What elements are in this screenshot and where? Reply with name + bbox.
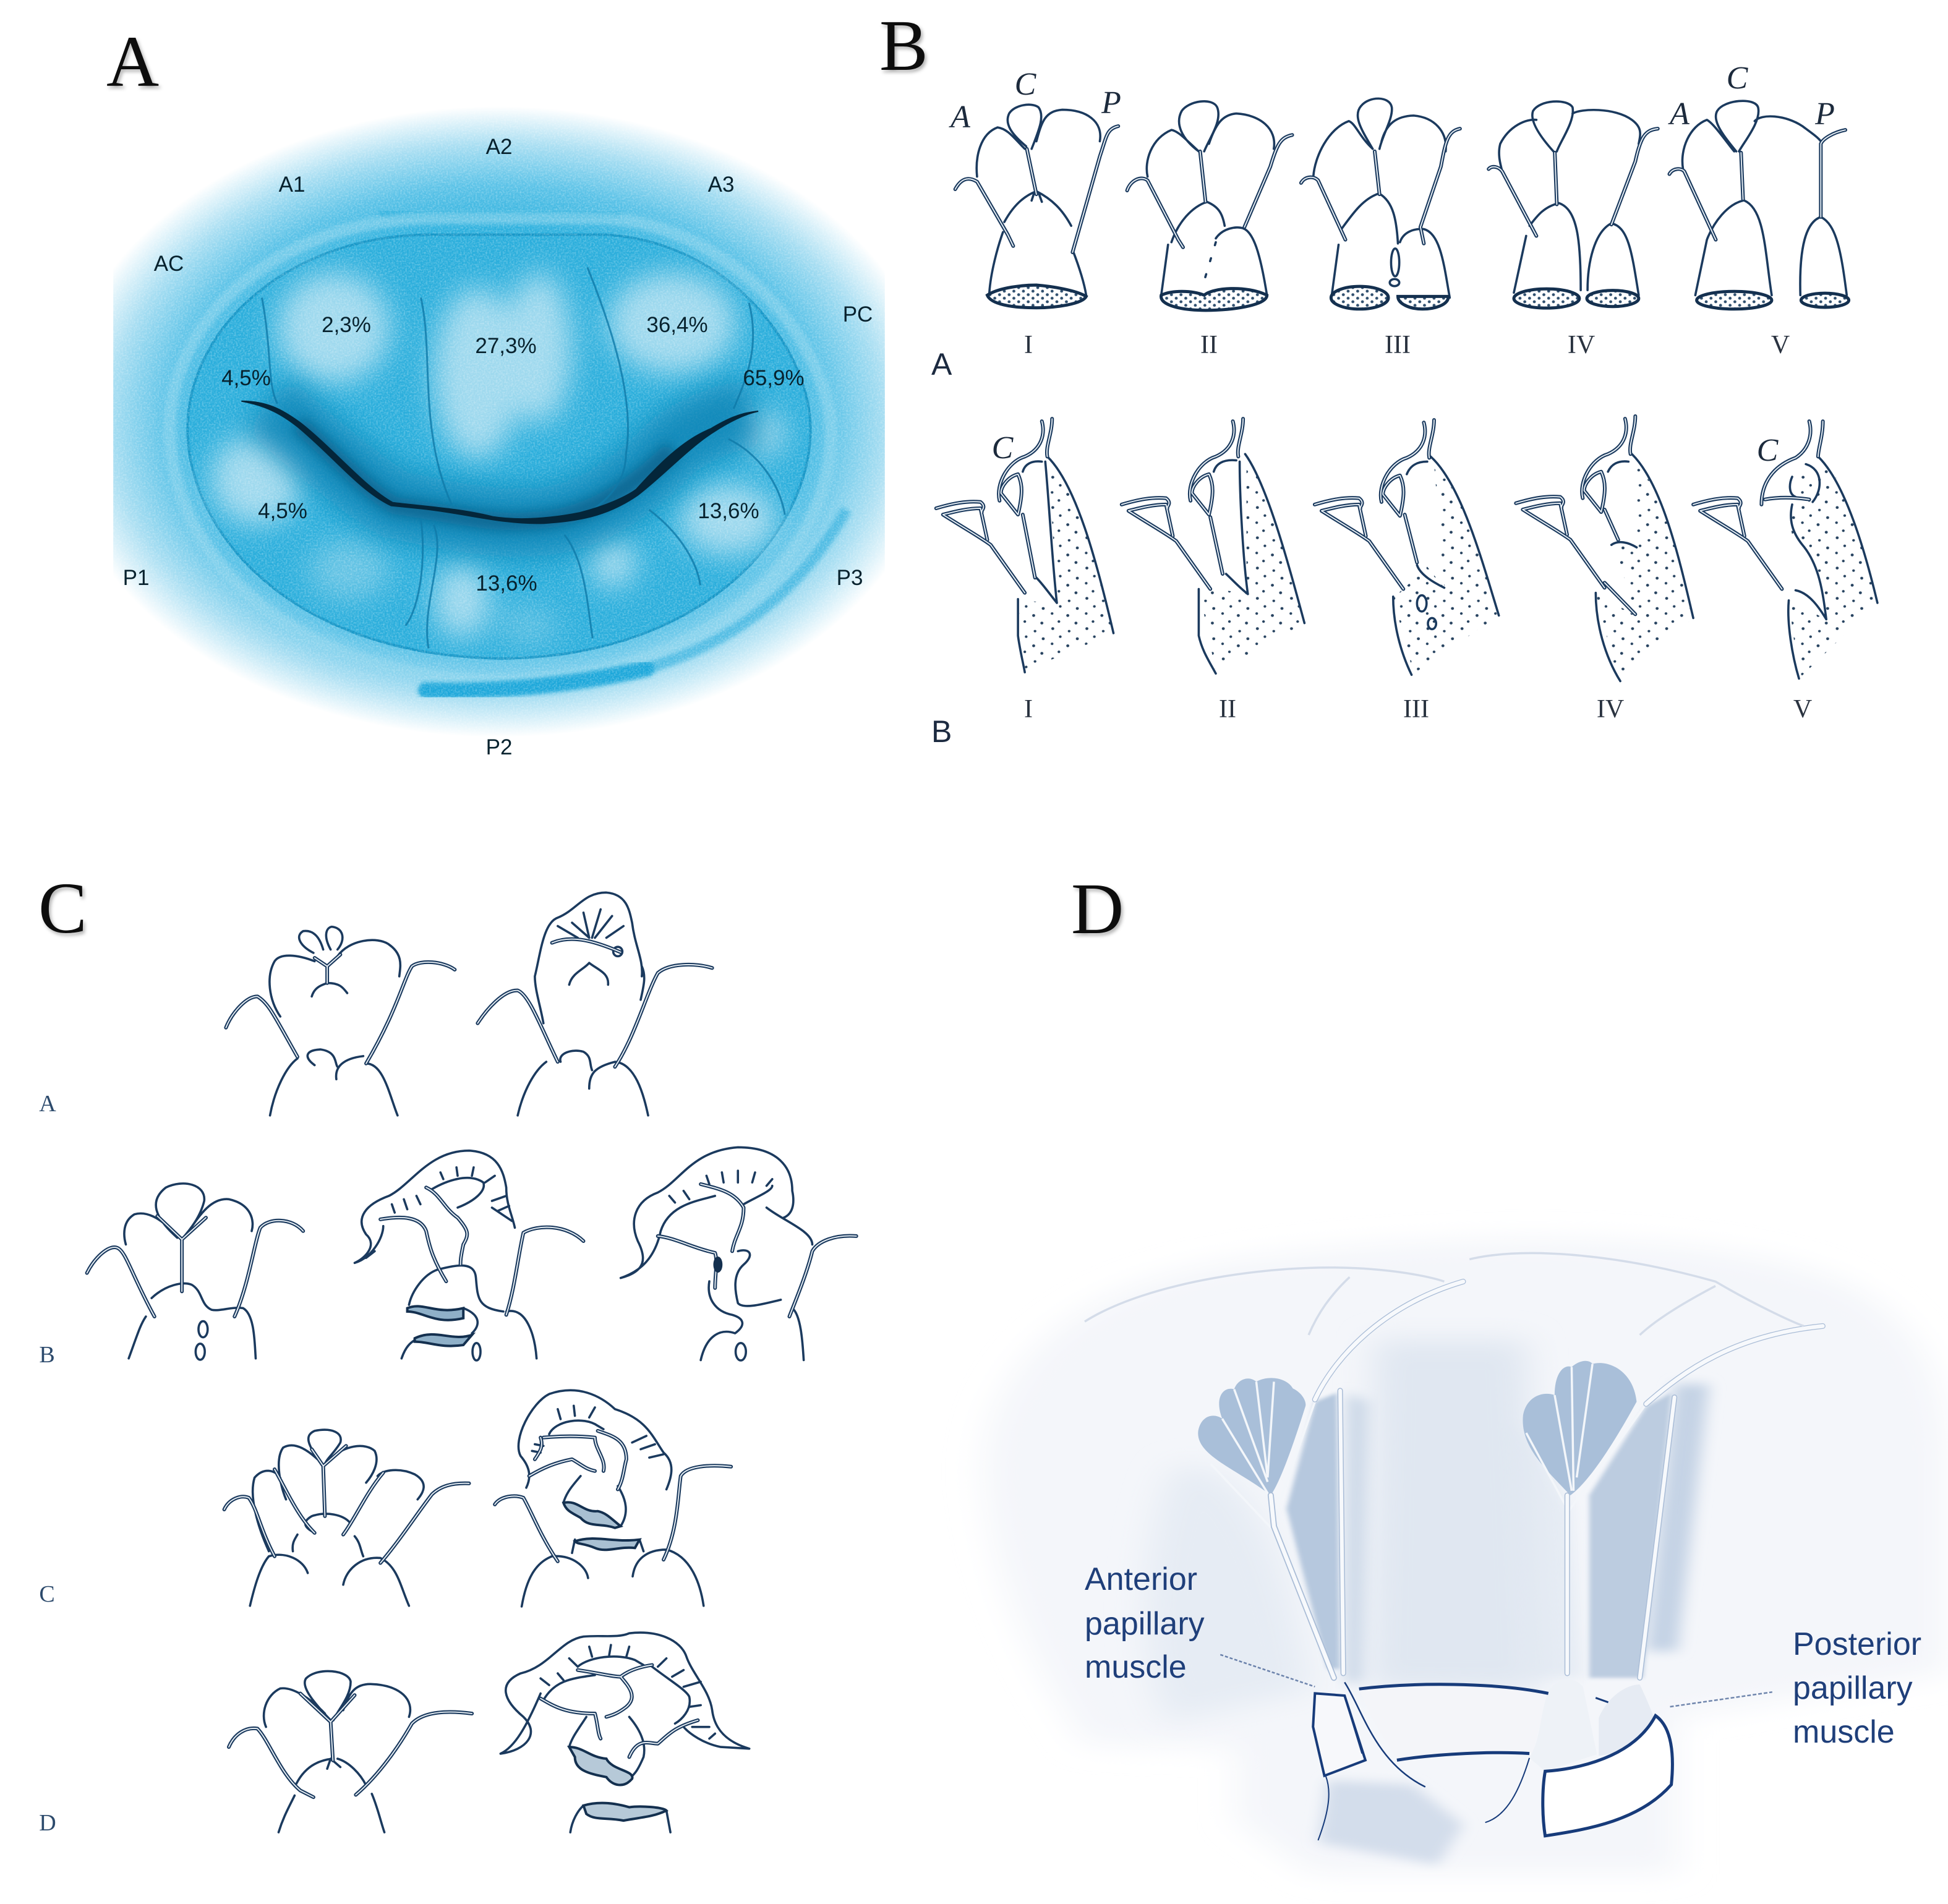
label: posterior papillary muscle: [1793, 1626, 1921, 1750]
label: anterior papillary muscle: [1085, 1561, 1205, 1685]
drawing III: [1301, 98, 1460, 309]
drawing V: [1669, 101, 1849, 309]
illustration: chordae and papillary muscles: [983, 1239, 1947, 1874]
band right: [1543, 1715, 1672, 1836]
labels: valve segments and percentages: 2,3%: [322, 313, 371, 337]
row A labels: A: [949, 100, 970, 135]
row B labels: C: [992, 430, 1014, 466]
row B labels: B: [931, 714, 952, 749]
row A labels: [931, 61, 1835, 382]
row B labels: [931, 430, 1812, 749]
row C open: [495, 1390, 731, 1607]
row A labels: II: [1200, 331, 1218, 359]
row B labels: C: [1757, 433, 1779, 468]
panel D: papillary muscles: [983, 868, 1947, 1874]
leaflet fan right: [1523, 1361, 1636, 1495]
row A labels: P: [1101, 85, 1121, 121]
label: anterior papillary muscle: papillary: [1085, 1606, 1205, 1642]
labels: valve segments and percentages: 13,6%: [698, 499, 759, 523]
label: posterior papillary muscle: Posterior: [1793, 1626, 1921, 1662]
row A labels: IV: [1568, 331, 1595, 359]
row B open 1: [355, 1151, 584, 1360]
rows A and B drawings: [87, 892, 857, 1360]
labels: valve segments and percentages: A3: [708, 173, 734, 197]
panel A: mitral valve atrial view: [57, 21, 939, 759]
labels: valve segments and percentages: 65,9%: [743, 366, 805, 390]
drawing II: [1127, 101, 1292, 310]
labels: valve segments and percentages: P3: [837, 566, 863, 590]
label: posterior papillary muscle: papillary: [1793, 1670, 1913, 1706]
row A labels: C: [1015, 67, 1037, 102]
section V: [1693, 421, 1878, 678]
panel letter D: D: [1071, 868, 1124, 949]
row A labels: III: [1385, 331, 1411, 359]
row B: lateral sections I to V: [936, 416, 1878, 681]
labels: valve segments and percentages: AC: [154, 252, 184, 276]
section II: [1122, 419, 1304, 673]
labels: valve segments and percentages: A1: [279, 173, 305, 197]
labels: valve segments and percentages: P1: [123, 566, 149, 590]
papillary head front: [1529, 1680, 1597, 1771]
row labels: D: [39, 1810, 56, 1836]
row A labels: C: [1727, 61, 1749, 96]
labels: valve segments and percentages: 4,5%: [258, 499, 307, 523]
labels: valve segments and percentages: 4,5%: [221, 366, 271, 390]
drawing I: [955, 105, 1118, 308]
labels: valve segments and percentages: P2: [486, 735, 512, 759]
drawing IV: [1489, 101, 1658, 308]
row A labels: A: [931, 347, 952, 382]
row B labels: V: [1793, 695, 1812, 724]
row B open 2: [621, 1147, 857, 1360]
row D closed: [229, 1671, 472, 1832]
labels: valve segments and percentages: PC: [843, 302, 873, 327]
section IV: [1516, 416, 1693, 681]
row B labels: I: [1024, 695, 1033, 724]
labels: valve segments and percentages: 13,6%: [476, 571, 537, 596]
row B labels: II: [1219, 695, 1236, 724]
row labels: A: [39, 1091, 56, 1117]
section I: [936, 419, 1114, 672]
row labels: [39, 1091, 56, 1836]
labels: valve segments and percentages: 27,3%: [475, 334, 537, 358]
row C closed: [224, 1430, 469, 1606]
row labels: B: [39, 1342, 55, 1368]
panel C: leaflet dissection diagrams: [38, 868, 857, 1836]
label: anterior papillary muscle: muscle: [1085, 1649, 1187, 1685]
illustration: blue valve surface: [113, 110, 885, 733]
labels: valve segments and percentages: A2: [486, 135, 512, 159]
labels: valve segments and percentages: 36,4%: [646, 313, 708, 337]
row B closed: [87, 1184, 303, 1360]
label: anterior papillary muscle: Anterior: [1085, 1561, 1197, 1597]
panel letter B: B: [879, 5, 928, 86]
row labels: C: [39, 1581, 55, 1607]
panel letter C: C: [38, 868, 87, 949]
section III: [1315, 420, 1499, 675]
band left: [1313, 1693, 1365, 1776]
labels: valve segments and percentages: [123, 135, 873, 759]
row A labels: I: [1024, 331, 1033, 359]
papillary head rear: [1599, 1684, 1655, 1756]
row A labels: P: [1814, 96, 1835, 132]
label: posterior papillary muscle: muscle: [1793, 1714, 1895, 1750]
rows C and D drawings: [224, 1390, 750, 1832]
row B labels: IV: [1597, 695, 1624, 724]
panel B: classification diagrams: [879, 5, 1878, 749]
coaptation line: [241, 401, 758, 523]
row B labels: III: [1403, 695, 1429, 724]
row D open: [500, 1633, 750, 1832]
row A open: [477, 892, 712, 1116]
row A labels: A: [1668, 96, 1690, 132]
leaflet fan left: [1198, 1378, 1305, 1495]
row A: surgical views I to V: [955, 98, 1849, 310]
row A closed: [226, 927, 455, 1116]
panel letter A: A: [106, 21, 159, 102]
row A labels: V: [1771, 331, 1790, 359]
